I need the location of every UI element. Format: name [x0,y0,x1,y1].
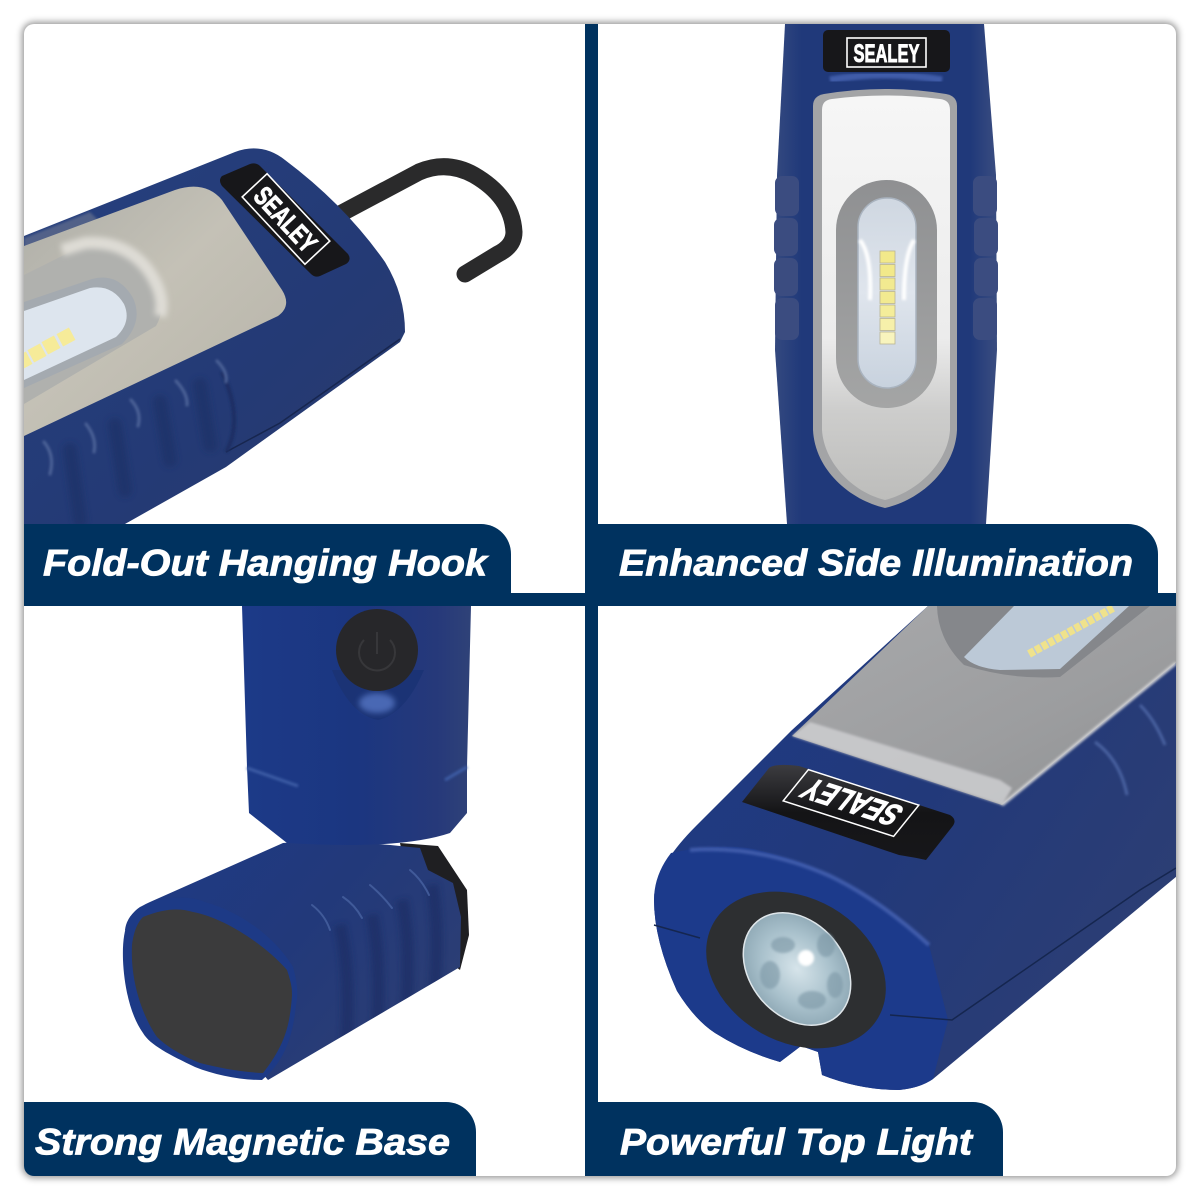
caption: Strong Magnetic Base [24,1102,476,1176]
panel: enhanced side illumination [774,24,998,524]
caption: Strong Magnetic Base: Strong Magnetic Base [35,1122,450,1162]
panel: fold-out hanging hook [14,148,514,524]
panel: strong magnetic base [123,606,471,1080]
caption: Enhanced Side Illumination [598,524,1158,593]
caption: Powerful Top Light [585,1102,1003,1176]
LED strip [880,251,895,344]
swivel base work light photo [123,606,471,1080]
panel: powerful top light [654,606,1177,1090]
SEALEY badge [220,163,350,277]
caption: Fold-Out Hanging Hook [24,524,511,593]
SEALEY badge [742,765,955,860]
front view work light photo [774,24,998,524]
lamp bezel [706,892,886,1048]
top light photo [654,606,1177,1090]
caption: Enhanced Side Illumination: Enhanced Side Illumination [619,542,1133,584]
hook-end work light photo [14,148,514,524]
caption: Powerful Top Light: Powerful Top Light [620,1122,974,1162]
SEALEY badge: SEALEY [854,40,920,68]
caption: Fold-Out Hanging Hook: Fold-Out Hanging Hook [43,542,490,584]
SEALEY badge: SEALEY [248,181,323,258]
power button [336,609,418,691]
SEALEY badge: SEALEY [793,772,911,831]
SEALEY badge [823,30,950,72]
